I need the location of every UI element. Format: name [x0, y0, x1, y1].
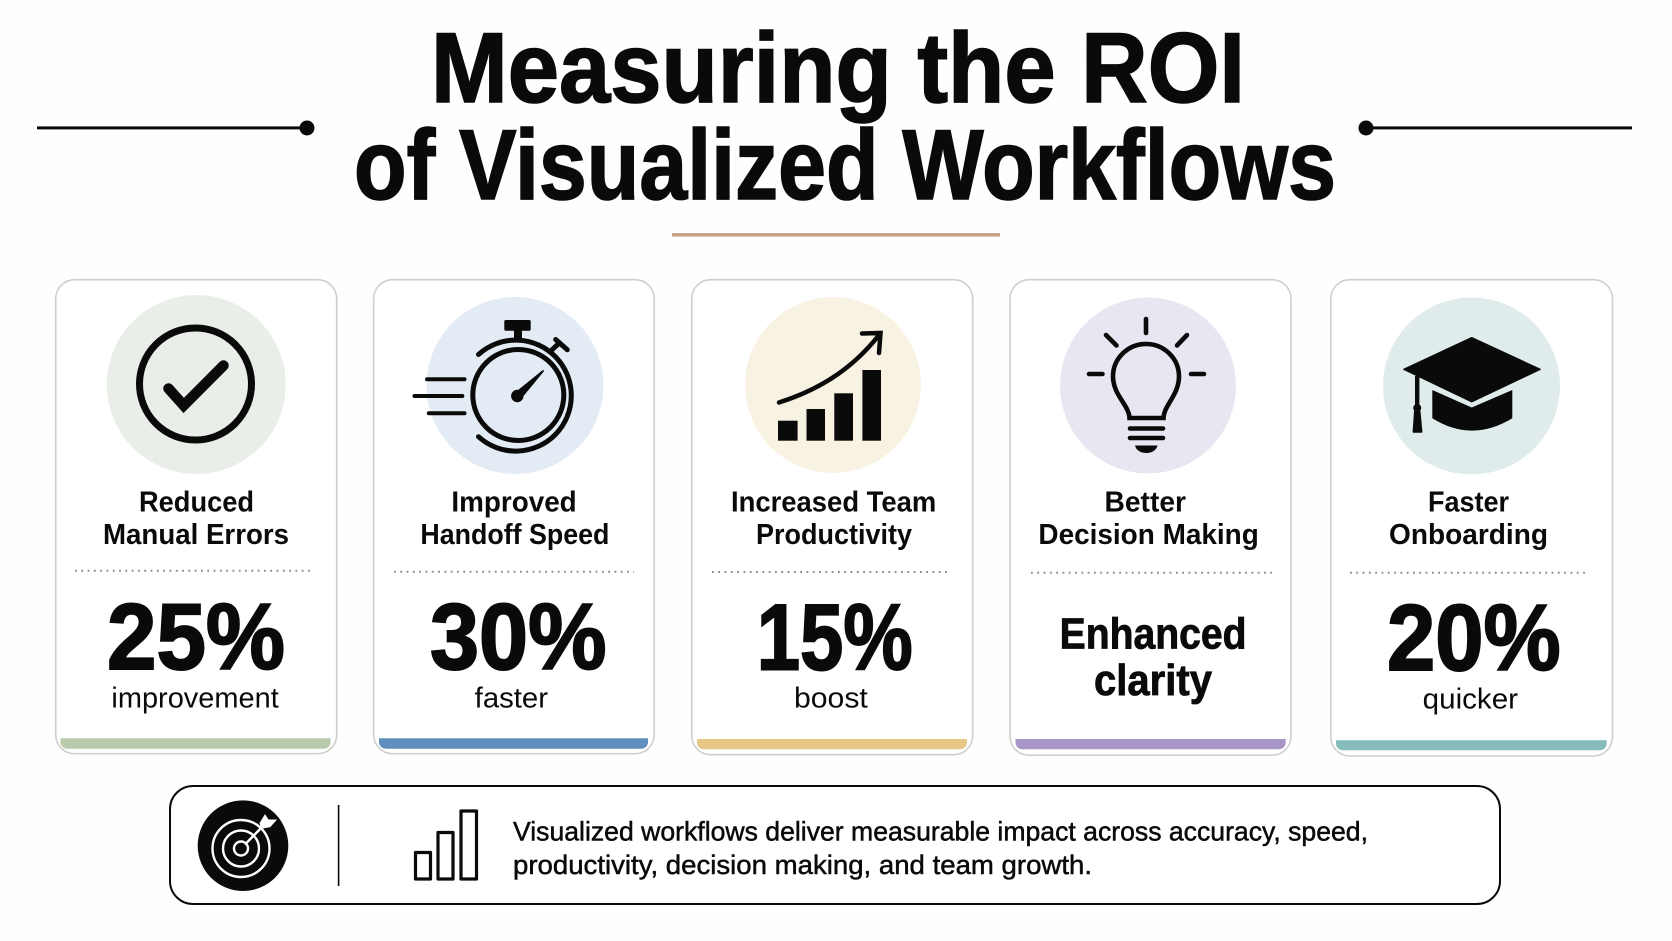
stat label: quicker: quicker: [1423, 684, 1518, 716]
heading: improved handoff speed: Handoff Speed: [420, 519, 609, 551]
heading: reduced manual errors: [103, 487, 289, 551]
heading: increased team productivity: Productivity: [756, 519, 912, 551]
title: of Visualized Workflows: [354, 109, 1336, 220]
stat label: boost: boost: [794, 682, 868, 714]
heading: better decision making: Decision Making: [1038, 519, 1259, 551]
heading: reduced manual errors: Manual Errors: [103, 519, 289, 551]
heading: improved handoff speed: Improved: [451, 487, 577, 519]
stat label: faster: faster: [475, 682, 548, 714]
icon: light bulb: [1089, 319, 1204, 453]
panel: reduced manual errors: [56, 280, 337, 754]
stat: 20%: 20%: [1387, 585, 1561, 690]
heading: increased team productivity: Increased Team: [731, 487, 936, 519]
icon: stopwatch with speed lines: [414, 320, 571, 451]
text: summary statement: productivity, decision making, and team growth.: [513, 850, 1092, 880]
stat label: improvement: improvement: [111, 682, 279, 714]
icon: rising bar chart with arrow: [778, 333, 881, 441]
stat: enhanced clarity: Enhanced: [1060, 609, 1247, 658]
heading: faster onboarding: Faster: [1428, 487, 1509, 519]
icon: graduation cap: [1404, 338, 1540, 433]
icon: target with arrow: [198, 800, 288, 891]
heading: increased team productivity: [731, 487, 936, 551]
stat: 15%: 15%: [757, 584, 913, 689]
text: summary statement: [513, 817, 1368, 880]
title: [354, 12, 1336, 220]
text: summary statement: Visualized workflows deliver measurable impact across accuracy, speed,: [513, 817, 1368, 847]
panel: increased team productivity: [692, 280, 973, 755]
heading: improved handoff speed: [420, 487, 609, 551]
heading: better decision making: [1038, 487, 1259, 551]
icon: outlined bar chart: [416, 811, 476, 879]
panel: faster onboarding: [1331, 280, 1612, 756]
stat: enhanced clarity: clarity: [1094, 656, 1212, 705]
heading: faster onboarding: Onboarding: [1389, 519, 1548, 551]
stat: 25%: 25%: [107, 584, 285, 689]
stat: 30%: 30%: [430, 584, 606, 689]
heading: better decision making: Better: [1104, 487, 1186, 519]
title: Measuring the ROI: [431, 12, 1245, 123]
heading: faster onboarding: [1389, 487, 1548, 551]
panel: summary callout: [170, 786, 1500, 904]
panel: improved handoff speed: [374, 280, 654, 754]
heading: reduced manual errors: Reduced: [139, 487, 254, 519]
panel: better decision making: [1010, 280, 1291, 755]
stat: enhanced clarity: [1060, 609, 1247, 705]
icon: check mark in circle: [140, 328, 252, 440]
